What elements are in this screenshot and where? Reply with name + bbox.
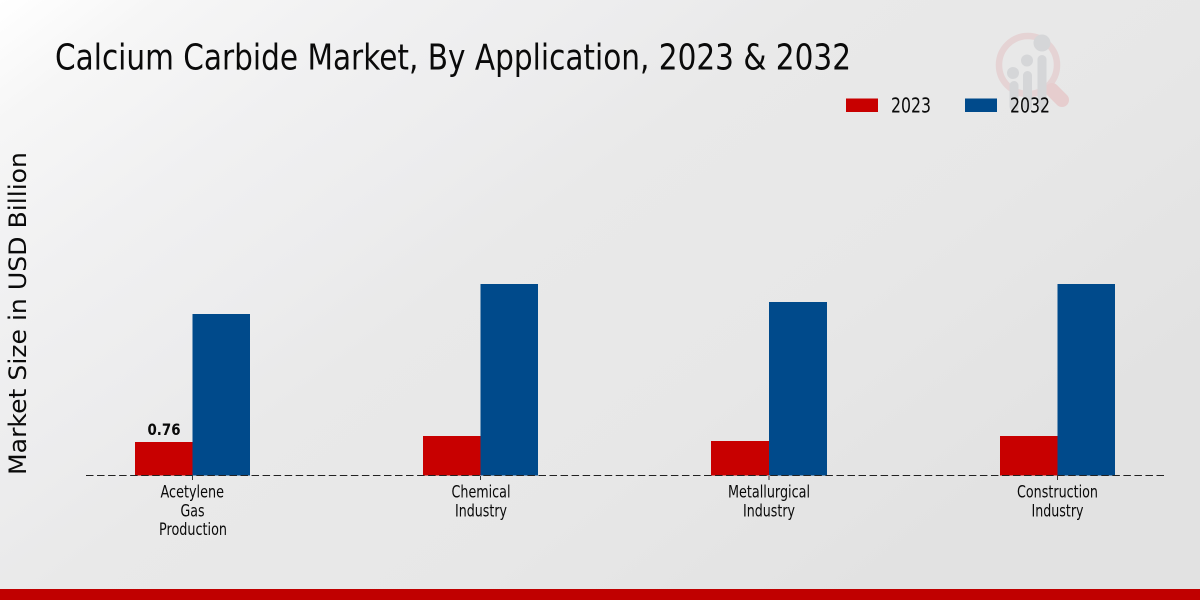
watermark logo — [999, 34, 1062, 111]
category label: Acetylene Gas Production — [159, 482, 227, 540]
title: Calcium Carbide Market, By Application, 2023 & 2032 — [55, 38, 851, 78]
value label 0.76: 0.76 — [148, 420, 180, 439]
bars: Construction Industry — [1000, 284, 1115, 476]
y axis title: Market Size in USD Billion — [4, 152, 32, 475]
legend — [846, 94, 1050, 118]
category label: Metallurgical Industry — [728, 482, 810, 522]
legend label 2023: 2023 — [891, 94, 931, 118]
category label: Metallurgical Industry: Metallurgical — [728, 482, 810, 502]
legend swatch 2023 — [846, 98, 878, 112]
category label: Construction Industry: Industry — [1032, 502, 1084, 522]
category label: Metallurgical Industry: Industry — [743, 502, 795, 522]
category label: Construction Industry: Construction — [1017, 482, 1098, 502]
legend label 2032: 2032 — [1010, 94, 1050, 118]
category label: Acetylene Gas Production: Gas — [180, 502, 205, 522]
bars: Metallurgical Industry — [711, 302, 827, 476]
category label: Construction Industry — [1017, 482, 1098, 522]
category label: Acetylene Gas Production: Production — [159, 520, 227, 540]
category label: Chemical Industry — [452, 482, 510, 522]
legend swatch 2032 — [965, 98, 997, 112]
bars: Acetylene Gas Production — [135, 314, 250, 476]
bars: Chemical Industry — [423, 284, 538, 476]
category label: Chemical Industry: Industry — [455, 502, 507, 522]
category label: Chemical Industry: Chemical — [452, 482, 510, 502]
bar chart — [86, 284, 1164, 540]
footer bar — [0, 589, 1200, 600]
category label: Acetylene Gas Production: Acetylene — [160, 482, 224, 502]
